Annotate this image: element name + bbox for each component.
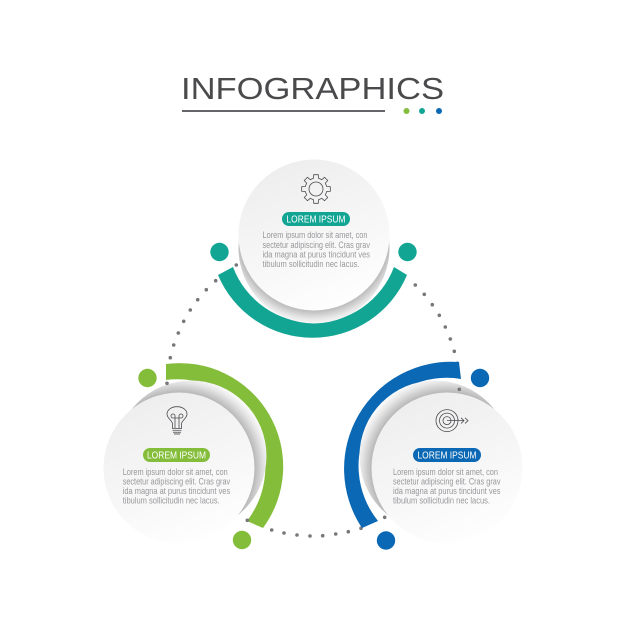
label pill: LOREM IPSUM	[418, 451, 476, 462]
connector dots	[165, 382, 249, 522]
dotted connector: right	[414, 283, 459, 365]
marker: green bottom	[233, 531, 251, 549]
text block: tibulum sollicitudin nec lacus.	[123, 495, 220, 505]
text block: ida magna at purus tincidunt ves	[123, 486, 231, 496]
label pill: LOREM IPSUM	[147, 451, 206, 462]
marker: green top	[138, 369, 157, 387]
text block	[393, 467, 501, 505]
marker: blue top	[471, 369, 489, 387]
icon: target	[436, 410, 468, 432]
text block: tibulum sollicitudin nec lacus.	[393, 495, 490, 505]
shadow disc	[238, 172, 390, 324]
text block: ida magna at purus tincidunt ves	[262, 249, 371, 259]
dotted connector: left	[168, 279, 218, 360]
text block: Lorem ipsum dolor sit amet, con	[123, 467, 228, 477]
panel: top step	[210, 160, 417, 338]
arc: teal	[218, 267, 407, 338]
label pill	[143, 448, 210, 462]
panel: left step	[104, 363, 283, 549]
connector dots	[383, 388, 461, 519]
arc: green	[166, 363, 283, 528]
label pill	[282, 212, 350, 226]
connector dot	[234, 263, 238, 267]
label pill	[413, 448, 481, 462]
marker: teal right	[398, 243, 417, 261]
dotted connector: bottom	[270, 526, 363, 538]
label pill: LOREM IPSUM	[286, 215, 346, 226]
text block: tibulum sollicitudin nec lacus.	[262, 259, 360, 269]
marker: teal left	[210, 243, 229, 261]
circle card	[104, 392, 254, 544]
arc: blue	[344, 362, 461, 528]
circle card	[238, 160, 390, 310]
text block	[123, 467, 231, 505]
text block	[262, 230, 371, 269]
text block: sectetur adipiscing elit. Cras grav	[393, 476, 501, 486]
icon: light bulb	[167, 407, 187, 434]
text block: ida magna at purus tincidunt ves	[393, 486, 501, 496]
circle card	[372, 392, 522, 544]
shadow disc	[360, 380, 510, 532]
text block: Lorem ipsum dolor sit amet, con	[262, 230, 368, 240]
marker: blue bottom	[377, 531, 395, 550]
title: INFOGRAPHICS	[181, 71, 444, 106]
panel: right step	[344, 362, 522, 550]
shadow disc	[116, 380, 266, 532]
icon: gear	[302, 175, 330, 203]
text block: sectetur adipiscing elit. Cras grav	[262, 240, 370, 250]
text block: sectetur adipiscing elit. Cras grav	[123, 476, 231, 486]
text block: Lorem ipsum dolor sit amet, con	[393, 467, 498, 477]
